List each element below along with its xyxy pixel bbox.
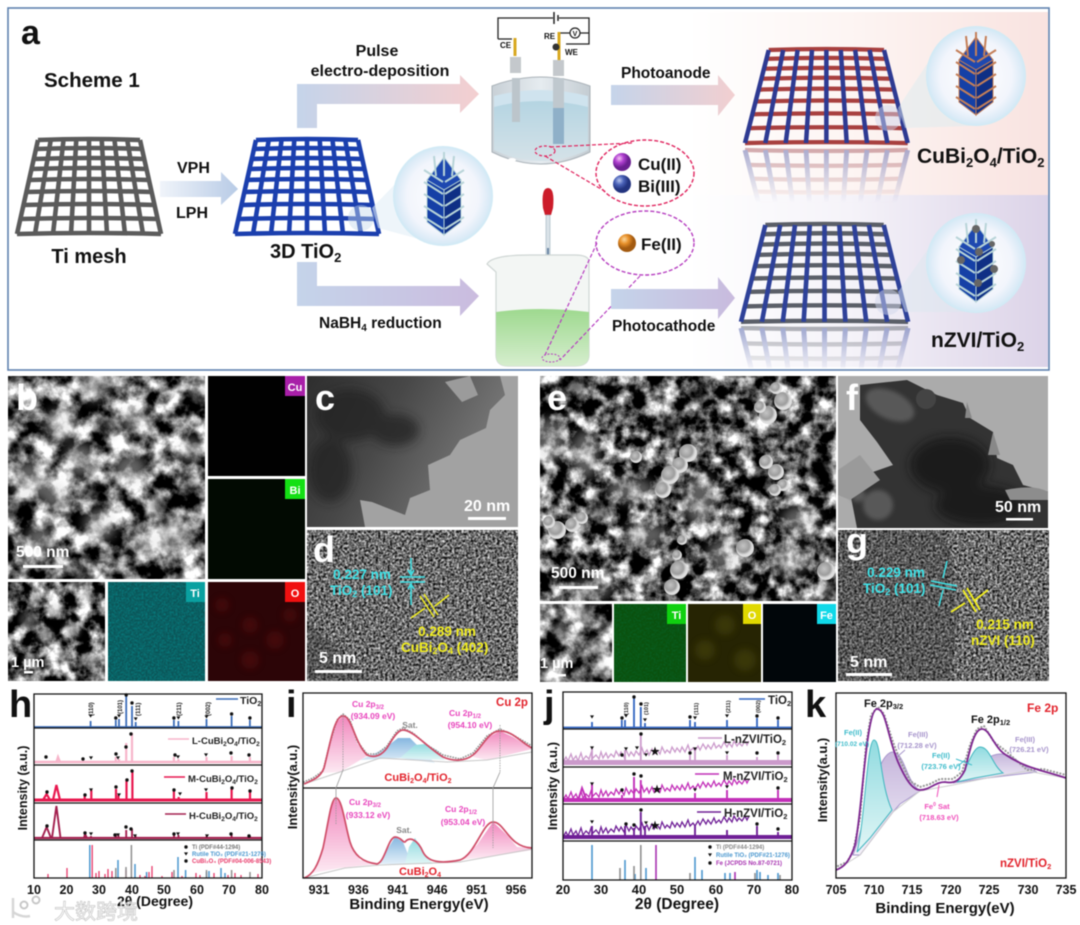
panel letter k: k	[805, 684, 827, 726]
fitted peak: Fe(II) 2p1/2	[957, 747, 1003, 782]
hkl labels: (002)	[756, 700, 762, 713]
EDS map: O: O	[748, 610, 757, 622]
scale bar: 1 µm: 1 µm	[11, 655, 44, 671]
Fe(III) annotations	[897, 730, 1049, 757]
annotation: nZVI lattice spacing: nZVI (110)	[971, 633, 1035, 648]
fitted peak: Fe(III) 2p1/2	[953, 754, 1037, 783]
EDS map: O: O	[291, 588, 300, 600]
axis labels: Intensity (a.u.)	[545, 742, 560, 830]
annotation: TiO2 lattice spacing: TiO	[330, 583, 352, 598]
icon: Ti mesh	[17, 139, 161, 234]
annotation: TiO2 lattice spacing: 0.229 nm	[867, 565, 925, 580]
trace: H-CuBi2O4/TiO2	[34, 806, 262, 838]
Fe0 satellite annotation: Sat	[936, 802, 950, 811]
panel b inset: SEM low magnification	[7, 581, 106, 682]
axis labels: 705	[826, 883, 846, 897]
legend: trace names: 4	[232, 816, 236, 823]
fit curve	[836, 709, 1066, 870]
scale bar: 500 nm: 500 nm	[551, 565, 604, 582]
annotation: CuBi2O4 lattice spacing: O	[438, 640, 448, 655]
fitted peak: Fe(II) 2p3/2	[857, 740, 892, 852]
trace: TiO2	[34, 696, 262, 727]
axis labels: 60	[190, 883, 204, 897]
annotation: nZVI lattice spacing: 0.215 nm	[976, 617, 1034, 632]
peak titles: 1/2	[1000, 718, 1010, 727]
Fe star markers: ★	[650, 821, 660, 832]
axis labels: 20	[556, 882, 570, 897]
scale bar: 500 nm: 500 nm	[16, 544, 69, 561]
panel d: HRTEM image	[306, 529, 519, 682]
reflection: CuBi2O4/TiO2 mesh	[742, 147, 910, 198]
annotation: TiO2 lattice spacing: (101)	[357, 583, 393, 598]
peak annotations: Cu 2p	[445, 804, 469, 814]
axis labels: 956	[506, 883, 526, 897]
peak annotations: (953.04 eV)	[441, 817, 485, 827]
legend: trace names: 2	[221, 816, 225, 823]
panel e inset: SEM low magnification	[539, 603, 613, 683]
legend: trace names: TiO	[240, 695, 257, 707]
label: NaBH4 reduction: 4	[361, 323, 367, 334]
peak annotations: 3/2	[376, 705, 385, 711]
Fe0 satellite annotation: Fe	[924, 802, 933, 811]
label: CuBi2O4/TiO2: /TiO	[997, 145, 1037, 168]
label: 3D TiO2: 2	[334, 250, 341, 265]
legend: trace names: O	[225, 774, 232, 785]
EDS map: Bi: Bi	[290, 485, 300, 497]
Fe(III) annotations: (726.21 eV)	[1009, 745, 1049, 754]
sample labels: CuBi	[384, 772, 410, 784]
callout: CuBi2O4/TiO2 magnified bubble	[875, 26, 1026, 131]
annotation: nZVI lattice spacing	[951, 588, 1035, 648]
icon: electrochemical cell: RE	[544, 32, 556, 41]
trace: L-nZVI/TiO2	[563, 733, 792, 765]
callout: TiO2 magnified bubble	[348, 146, 493, 246]
hkl labels: (110)	[624, 702, 630, 715]
legend: trace names: 4	[232, 779, 236, 786]
scale bar: 50 nm: 50 nm	[995, 499, 1041, 516]
Fe(III) annotations: (712.28 eV)	[897, 741, 937, 750]
hkl labels: (211)	[177, 702, 183, 716]
sample labels: /TiO	[426, 772, 448, 784]
annotation: TiO2 lattice spacing: 2	[885, 587, 890, 597]
panel letter j: j	[543, 684, 555, 726]
legend: trace names: H-CuBi	[189, 811, 221, 822]
axis labels: 70	[222, 883, 236, 897]
scale bar: 1 µm: 1 µm	[540, 656, 573, 672]
panel g: HRTEM image	[837, 529, 1050, 682]
panel c: TEM image	[306, 375, 518, 528]
watermark: 大数跨境	[54, 901, 138, 924]
icon: electrochemical cell: WE	[565, 48, 579, 57]
legend: reference cards: CuBi₂O₄ (PDF#04-006-8543)	[192, 859, 271, 865]
peak markers	[590, 695, 780, 831]
panel letter c: c	[315, 377, 335, 418]
arrow: NaBH4 reduction	[297, 262, 479, 316]
legend: trace names: O	[227, 736, 234, 747]
axis labels: 50	[670, 882, 684, 897]
EDS map: O	[207, 581, 306, 682]
icon: nZVI/TiO2 mesh	[741, 224, 908, 322]
EDS map: Ti: Ti	[672, 610, 681, 622]
legend: trace names: 2	[254, 779, 258, 786]
legend: trace names	[164, 695, 261, 823]
Fe(II) annotations: Fe(II)	[932, 751, 950, 760]
peak annotations: (933.12 eV)	[346, 810, 390, 820]
legend: reference cards: Ti (PDF#44-1294)	[716, 845, 764, 851]
trace: M-CuBi2O4/TiO2	[34, 771, 262, 800]
panel letter g: g	[846, 520, 868, 561]
axis labels: 40	[632, 882, 646, 897]
axis labels: 735	[1056, 883, 1076, 897]
watermark	[13, 896, 138, 924]
legend: trace names	[695, 695, 791, 821]
Fe(III) annotations: Fe(III)	[1015, 735, 1036, 744]
hkl labels	[624, 700, 762, 715]
peak titles	[864, 698, 1010, 727]
peak titles: 3/2	[893, 702, 903, 711]
legend: trace names: 2	[783, 775, 788, 784]
Fe0 satellite annotation: (718.63 eV)	[919, 813, 959, 822]
annotation: CuBi2O4 lattice spacing: 0.289 nm	[418, 624, 476, 639]
legend: reference cards: Rutile TiO₂ (PDF#21-1276)	[716, 853, 790, 859]
legend: reference cards: Rutile TiO₂ (PDF#21-1276)	[192, 852, 266, 858]
axis labels: Intensity (a.u.)	[16, 746, 30, 830]
label: CuBi2O4/TiO2: O	[973, 145, 990, 168]
annotation: TiO2 lattice spacing: TiO	[863, 581, 885, 596]
frame	[303, 693, 532, 878]
peak annotations: 1/2	[473, 714, 482, 720]
callout: Cu and Bi ions: Bi(III)	[638, 177, 680, 196]
panel letter f: f	[846, 377, 859, 418]
sample labels: 4	[437, 872, 441, 879]
Fe0 satellite annotation: 0	[933, 802, 936, 808]
axis labels: 30	[594, 882, 608, 897]
legend: trace names: 2	[782, 738, 786, 747]
axis labels: 30	[92, 883, 106, 897]
annotation: TiO2 lattice spacing: 0.227 nm	[333, 567, 391, 582]
satellite annotations	[396, 720, 418, 835]
label: CuBi2O4/TiO2: CuBi	[917, 145, 966, 168]
chart k: Fe 2p XPS	[815, 693, 1076, 917]
axis labels: 60	[709, 882, 723, 897]
lower spectrum: CuBi2O4	[304, 798, 532, 878]
label: CuBi2O4/TiO2: 2	[1037, 155, 1044, 170]
sample labels: 2	[1047, 862, 1051, 871]
annotation: CuBi2O4 lattice spacing: 4	[448, 646, 453, 656]
chart i: Cu 2p XPS	[285, 693, 532, 913]
peak titles: Fe 2p	[864, 698, 893, 710]
sample labels: CuBi	[399, 866, 425, 878]
frame and dividers	[34, 694, 262, 878]
axis labels: 730	[1018, 883, 1038, 897]
background line	[836, 771, 1066, 870]
legend: trace names: 2	[783, 812, 787, 821]
axis labels	[545, 742, 799, 913]
legend: trace names: L-CuBi	[192, 736, 223, 747]
satellite annotations: Sat.	[396, 825, 412, 835]
legend: reference cards: Fe (JCPDS No.87-0721)	[716, 861, 782, 867]
data points	[838, 707, 1066, 866]
sample labels: 2	[425, 872, 429, 879]
sample labels: 4	[423, 778, 427, 785]
legend: reference cards: Ti (PDF#44-1294)	[192, 845, 240, 851]
scale bar: 5 nm: 5 nm	[319, 650, 356, 667]
peak annotations: (934.09 eV)	[351, 711, 395, 721]
axis labels: Binding Energy(eV)	[349, 896, 489, 913]
nanoparticle spheres	[543, 382, 835, 595]
sample labels: Fe 2p	[1027, 701, 1058, 715]
icon: electrochemical cell: V	[573, 31, 578, 38]
hkl labels: (111)	[136, 703, 142, 716]
EDS map: Cu	[208, 376, 305, 476]
icon: 3D TiO2 mesh	[235, 139, 379, 234]
label: nZVI/TiO2: 2	[1017, 339, 1024, 354]
Fe(II) annotations: Fe(II)	[844, 728, 862, 737]
axis labels: 720	[941, 883, 961, 897]
axis labels: 20	[60, 883, 73, 897]
legend: reference cards	[184, 845, 271, 865]
label: NaBH4 reduction: NaBH	[319, 315, 361, 332]
label: nZVI/TiO2: nZVI/TiO	[931, 329, 1017, 352]
label: NaBH4 reduction: reduction	[367, 315, 442, 332]
axis labels: Intensity(a.u.)	[815, 738, 830, 822]
label: 3D TiO2: 3D TiO	[270, 241, 334, 263]
peak annotations	[346, 699, 492, 827]
legend: trace names: /TiO	[238, 736, 256, 747]
label: CuBi2O4/TiO2: 2	[966, 155, 973, 170]
reflection: nZVI/TiO2 mesh	[738, 326, 911, 368]
axis labels: 10	[27, 883, 41, 897]
label: LPH: LPH	[176, 205, 208, 222]
chart j: XRD of nZVI/TiO2	[545, 692, 799, 913]
legend: trace names: /TiO	[236, 811, 254, 822]
callout: nZVI/TiO2 magnified bubble	[875, 213, 1026, 315]
panel letter h: h	[9, 684, 32, 726]
trace: L-CuBi2O4/TiO2	[34, 733, 262, 762]
axis labels: 50	[157, 883, 171, 897]
annotation: TiO2 lattice spacing	[863, 561, 957, 606]
callout: Cu and Bi ions	[535, 140, 694, 206]
legend: trace names: 2	[256, 741, 260, 748]
callout: Cu and Bi ions: Cu(II)	[638, 155, 681, 174]
peak annotations: Cu 2p	[449, 708, 473, 718]
legend: trace names: 2	[257, 701, 261, 708]
sample labels: O	[414, 772, 423, 784]
fitted peak: Fe(III) 2p3/2	[853, 752, 920, 855]
legend: trace names: M-nZVI/TiO	[723, 771, 783, 783]
EDS map: Fe	[763, 604, 836, 682]
axis labels: 80	[785, 882, 799, 897]
sample labels: Cu 2p	[496, 697, 528, 709]
hkl labels: (101)	[644, 702, 650, 715]
hkl labels: (101)	[118, 700, 124, 714]
hkl labels: (110)	[89, 702, 95, 716]
legend: trace names: /TiO	[236, 774, 254, 785]
legend: trace names: H-nZVI/TiO	[724, 808, 783, 820]
sample labels: 2	[410, 778, 414, 785]
EDS map: Ti	[613, 603, 687, 683]
axis labels: 70	[747, 882, 761, 897]
scale bar: 5 nm	[315, 650, 362, 673]
Fe(III) annotations: Fe(III)	[908, 730, 929, 739]
Fe(II) annotations: (710.02 eV)	[835, 741, 869, 748]
icon: electrochemical cell: CE	[500, 41, 512, 50]
peak markers	[44, 693, 252, 838]
scale bar: 5 nm	[846, 654, 892, 676]
panel f: TEM image	[838, 376, 1049, 529]
annotation: CuBi2O4 lattice spacing: CuBi	[401, 640, 432, 655]
arrow: photoanode	[611, 75, 735, 116]
label: CuBi2O4/TiO2: 4	[990, 155, 998, 170]
peak annotations: 3/2	[373, 803, 382, 809]
EDS map: Ti: Ti	[190, 588, 200, 600]
peak annotations: Cu 2p	[349, 797, 373, 807]
frame and dividers	[563, 692, 792, 880]
Fe(II) annotations	[835, 728, 972, 771]
icon: electrochemical cell	[492, 12, 590, 164]
reference bars	[48, 845, 258, 878]
arrow: photocathode	[611, 277, 735, 319]
legend: trace names: M-CuBi	[188, 774, 221, 785]
axis labels: 2θ (Degree)	[117, 893, 193, 909]
satellite annotations: Sat.	[402, 720, 418, 730]
sample labels: O	[429, 866, 438, 878]
frame	[836, 693, 1066, 878]
legend: trace names: O	[225, 811, 232, 822]
panel e: SEM image	[539, 375, 837, 602]
EDS map: Ti	[107, 581, 206, 682]
legend: trace names: 2	[787, 699, 791, 708]
legend: trace names: 4	[234, 741, 238, 748]
label: photocathode: Photocathode	[612, 318, 716, 335]
peak annotations: 1/2	[469, 810, 478, 816]
axis labels: 951	[466, 883, 487, 897]
trace: M-nZVI/TiO2	[563, 777, 792, 802]
connector lines	[336, 770, 500, 822]
legend: trace names: L-nZVI/TiO	[724, 734, 782, 746]
sample labels: 2	[448, 778, 452, 785]
panel letter e: e	[547, 377, 567, 418]
axis labels: 715	[902, 883, 922, 897]
axis labels: Binding Energy(eV)	[875, 900, 1015, 917]
axis labels	[16, 746, 269, 909]
Fe star markers: ★	[650, 747, 660, 758]
axis labels: 941	[387, 883, 408, 897]
annotation: TiO2 lattice spacing: (101)	[890, 581, 926, 596]
callout: Fe ions	[545, 211, 694, 360]
legend: trace names: TiO	[768, 695, 787, 707]
chart h: XRD of CuBi2O4/TiO2	[16, 693, 271, 909]
upper spectrum: CuBi2O4/TiO2	[304, 714, 532, 784]
peak titles: Fe 2p	[971, 714, 1000, 726]
scale bar: 20 nm: 20 nm	[464, 498, 510, 515]
axis labels: 40	[125, 883, 139, 897]
panel letter b: b	[16, 377, 38, 418]
label: VPH: VPH	[177, 160, 210, 177]
legend: trace names: 2	[254, 816, 258, 823]
annotation: CuBi2O4 lattice spacing: 2	[432, 646, 438, 656]
sample labels: nZVI/TiO	[1000, 858, 1047, 870]
axis labels: 2θ (Degree)	[635, 896, 719, 913]
panel b: SEM image	[7, 375, 206, 580]
EDS map: Bi	[208, 479, 305, 579]
panel letter a: a	[21, 14, 41, 52]
EDS map: O	[687, 603, 762, 683]
hkl labels	[89, 700, 212, 716]
axis labels: 931	[309, 883, 329, 897]
legend: reference cards	[708, 845, 790, 867]
axis labels: 710	[864, 883, 884, 897]
label: photoanode: Photoanode	[621, 65, 711, 82]
peak annotations: (954.10 eV)	[448, 720, 492, 730]
arrow: VPH LPH	[160, 172, 238, 205]
axis labels: 725	[979, 883, 999, 897]
axis labels	[815, 738, 1076, 917]
hkl labels: (002)	[206, 702, 212, 716]
axis labels	[285, 745, 526, 913]
legend: trace names: 2	[221, 779, 225, 786]
axis labels: Intensity(a.u.)	[285, 745, 300, 829]
Fe(II) annotations: (723.76 eV)	[921, 762, 961, 771]
arrow: pulse electro-deposition	[297, 75, 479, 128]
EDS map: Cu: Cu	[288, 382, 302, 394]
annotation: CuBi2O4 lattice spacing	[401, 594, 488, 656]
icon: dropper	[543, 188, 553, 308]
panel a: scheme	[8, 8, 1049, 426]
label: Ti mesh: Ti mesh	[51, 246, 127, 268]
icon: CuBi2O4/TiO2 mesh	[745, 49, 908, 143]
axis labels: 80	[255, 883, 269, 897]
axis labels: 936	[348, 883, 369, 897]
hkl labels: (111)	[694, 703, 700, 715]
Fe star markers	[650, 747, 662, 832]
Fe star markers: ★	[652, 785, 662, 796]
peak annotations: Cu 2p	[352, 699, 376, 709]
scale bar: 5 nm: 5 nm	[850, 654, 887, 671]
heading: Scheme 1: Scheme 1	[44, 69, 140, 92]
panel letter i: i	[286, 684, 297, 726]
annotation: TiO2 lattice spacing: 2	[352, 589, 357, 599]
label: pulse electro-deposition: electro-deposition	[311, 63, 449, 80]
label: pulse electro-deposition: Pulse	[356, 43, 398, 60]
trace: TiO2	[563, 697, 792, 728]
annotation: TiO2 lattice spacing	[330, 558, 425, 605]
EDS map: Fe: Fe	[820, 610, 833, 622]
callout: Fe ions: Fe(II)	[641, 235, 682, 254]
annotation: CuBi2O4 lattice spacing: (402)	[453, 640, 488, 655]
icon: beaker with green solution	[487, 255, 589, 366]
Fe0 satellite annotation	[919, 785, 959, 822]
trace: H-nZVI/TiO2	[563, 812, 792, 839]
hkl labels: (211)	[726, 700, 732, 713]
legend: trace names: 2	[223, 741, 227, 748]
sample labels	[384, 697, 528, 879]
axis labels: 946	[427, 883, 448, 897]
sample labels	[1000, 701, 1058, 871]
panel letter d: d	[313, 529, 335, 570]
reference bars	[592, 845, 780, 880]
